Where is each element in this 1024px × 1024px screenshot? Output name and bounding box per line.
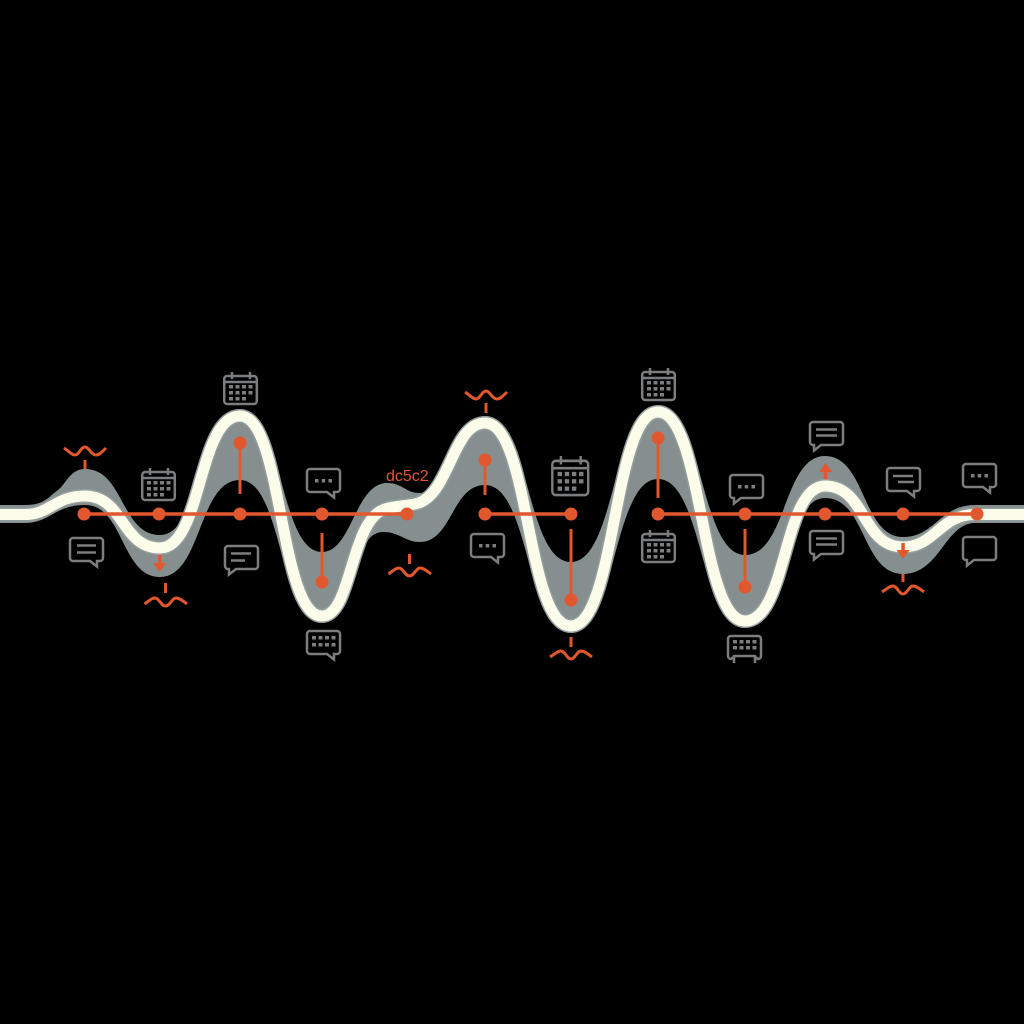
- wave marker: last valley: [882, 574, 924, 594]
- icon: dots bubble sixth node: [471, 534, 504, 562]
- icon: dots bubble fourth node: [307, 469, 340, 498]
- gray variance band: [0, 405, 1024, 633]
- wave marker: shoulder: [388, 554, 431, 576]
- label: dc5c2: dc5c2: [386, 468, 429, 485]
- icon: calendar 4: [642, 368, 675, 400]
- orange timeline nodes: [78, 432, 984, 606]
- icon: text bubble above tenth node: [810, 422, 843, 450]
- arrow: down at second node: [153, 555, 166, 572]
- orange baseline connectors: [84, 512, 977, 516]
- arrow: down at eleventh node: [896, 543, 910, 559]
- wave marker: deep valley: [550, 637, 592, 659]
- wave marker: second valley: [144, 583, 187, 606]
- icon: text bubble eleventh node: [887, 468, 920, 496]
- icon: text bubble first node: [70, 538, 103, 566]
- icon: chat keypad bubble: [307, 631, 340, 660]
- icon: text bubble below tenth node: [810, 531, 843, 560]
- icon: calendar 1: [142, 468, 175, 500]
- white center line rim: [0, 412, 1024, 626]
- icon: calendar 5: [642, 530, 675, 562]
- white center line: [0, 412, 1024, 626]
- wave marker: third peak: [465, 391, 507, 413]
- wave marker: first peak: [64, 447, 106, 469]
- icon: dots bubble end: [963, 464, 996, 492]
- orange stems: [240, 438, 745, 600]
- icon: text bubble third node: [225, 546, 258, 574]
- icon: inverted calendar: [728, 636, 761, 663]
- icon: empty bubble end: [963, 537, 996, 566]
- icon: calendar 2: [224, 372, 257, 404]
- icon: dots bubble ninth node: [730, 475, 763, 504]
- icon: calendar 3 large: [552, 456, 588, 495]
- arrow: up at tenth node: [819, 463, 832, 479]
